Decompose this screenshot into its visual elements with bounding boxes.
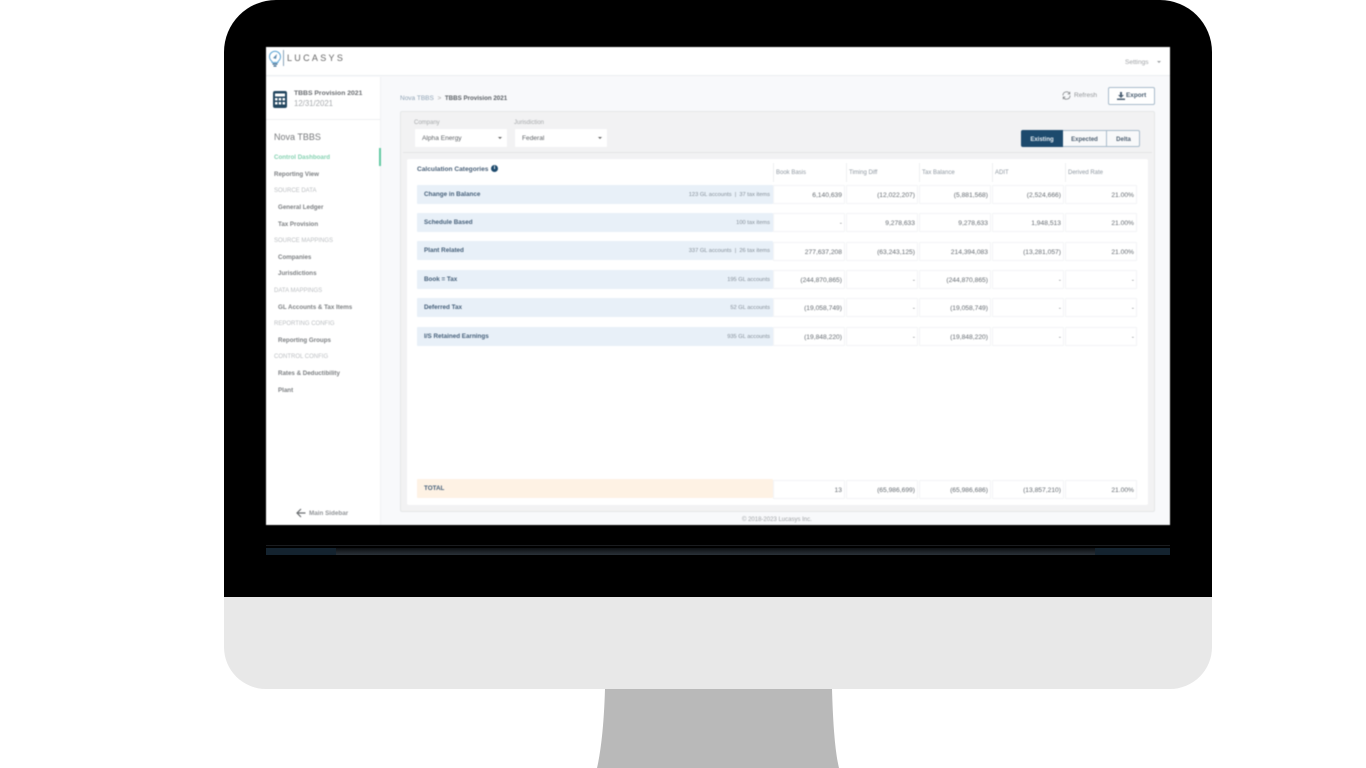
export label: Export xyxy=(1126,92,1146,99)
filter divider xyxy=(403,152,1152,153)
row label: change in balance xyxy=(417,185,773,204)
row label: book = tax: 195 GL accounts xyxy=(727,277,770,283)
logo wordmark: LUCASYS xyxy=(287,53,345,63)
row label: i/s retained earnings: I/S Retained Earnings xyxy=(424,333,489,340)
jurisdiction value: Federal xyxy=(522,135,544,142)
nav: jurisdictions: Jurisdictions xyxy=(278,270,317,277)
row values: book = tax: - xyxy=(913,277,915,284)
icon: refresh xyxy=(1062,90,1071,100)
jurisdiction dropdown xyxy=(515,129,607,147)
company value: Alpha Energy xyxy=(422,135,462,142)
row label: change in balance: Change in Balance xyxy=(424,191,480,198)
provision date: 12/31/2021 xyxy=(294,99,333,108)
row values: i/s retained earnings: - xyxy=(1132,334,1134,341)
row values: change in balance: (12,022,207) xyxy=(877,192,915,199)
row values: plant related xyxy=(774,242,1136,260)
row values: i/s retained earnings: - xyxy=(1059,334,1061,341)
nav: gl accounts and tax items: GL Accounts & Tax Items xyxy=(278,304,352,311)
company label: Company xyxy=(414,120,440,126)
calculation table card xyxy=(407,159,1148,505)
toggle: expected xyxy=(1063,130,1107,147)
row values: i/s retained earnings: (19,848,220) xyxy=(804,334,842,341)
section: source data: SOURCE DATA xyxy=(274,188,316,194)
row values: change in balance xyxy=(774,186,1136,204)
total values: 13 xyxy=(835,487,842,494)
toggle: existing: Existing xyxy=(1030,137,1054,143)
nav: plant: Plant xyxy=(278,387,293,394)
row values: plant related: (63,243,125) xyxy=(877,249,915,256)
sidebar header divider xyxy=(266,119,380,120)
top bar xyxy=(266,47,1170,76)
row values: plant related: 277,637,208 xyxy=(805,249,842,256)
nav: reporting groups: Reporting Groups xyxy=(278,337,331,344)
toggle: delta: Delta xyxy=(1116,137,1131,143)
icon: calculator xyxy=(272,90,288,109)
nav: reporting view: Reporting View xyxy=(274,171,319,178)
row values: plant related: (13,281,057) xyxy=(1023,249,1061,256)
company dropdown xyxy=(415,129,507,147)
jurisdiction label: Jurisdiction xyxy=(514,120,544,126)
row values: book = tax: - xyxy=(1132,277,1134,284)
row values: plant related: 21.00% xyxy=(1111,249,1134,256)
row label: plant related: Plant Related xyxy=(424,247,464,254)
row label: i/s retained earnings: 935 GL accounts xyxy=(727,334,770,340)
nav: control dashboard: Control Dashboard xyxy=(274,154,330,161)
row values: deferred tax: - xyxy=(1132,305,1134,312)
total label xyxy=(417,479,773,498)
row values: deferred tax: (19,058,749) xyxy=(804,305,842,312)
export button xyxy=(1108,87,1155,105)
row values: change in balance: 21.00% xyxy=(1111,192,1134,199)
settings caret xyxy=(1157,61,1161,65)
icon: info: i xyxy=(494,165,495,171)
column header: timing diff: Timing Diff xyxy=(849,170,877,176)
view toggle xyxy=(1021,130,1140,147)
row values: change in balance: 6,140,639 xyxy=(812,192,842,199)
total values: 21.00% xyxy=(1111,487,1134,494)
application screen xyxy=(266,47,1170,525)
row label: book = tax: Book = Tax xyxy=(424,276,457,283)
nav: tax provision: Tax Provision xyxy=(278,221,318,228)
row values: deferred tax xyxy=(774,298,1136,316)
icon: download xyxy=(1116,91,1126,101)
table heading: Calculation Categories xyxy=(417,166,488,173)
column header: adit: ADIT xyxy=(995,170,1009,176)
row values: schedule based: 9,278,633 xyxy=(885,220,915,227)
row values: deferred tax: - xyxy=(1059,305,1061,312)
row label: change in balance: 123 GL accounts | 37 tax items xyxy=(689,192,770,198)
row values: change in balance: (2,524,666) xyxy=(1027,192,1061,199)
total values: (13,857,210) xyxy=(1023,487,1061,494)
total values: (65,986,686) xyxy=(950,487,988,494)
row values: i/s retained earnings xyxy=(774,328,1136,346)
active nav marker xyxy=(379,148,381,166)
sidebar heading: Nova TBBS xyxy=(274,132,321,142)
row values: schedule based: 9,278,633 xyxy=(958,220,988,227)
row values: deferred tax: - xyxy=(913,305,915,312)
column header: tax balance: Tax Balance xyxy=(922,170,955,176)
column header: derived rate: Derived Rate xyxy=(1068,170,1103,176)
row values: i/s retained earnings: - xyxy=(913,334,915,341)
monitor bezel xyxy=(224,0,1212,597)
screen taskbar strip xyxy=(266,525,1170,555)
row values: deferred tax: (19,058,749) xyxy=(950,305,988,312)
row label: i/s retained earnings xyxy=(417,327,773,346)
icon: info xyxy=(491,165,498,172)
sidebar xyxy=(266,77,381,525)
column header: book basis: Book Basis xyxy=(776,170,806,176)
breadcrumb: Nova TBBS > TBBS Provision 2021 xyxy=(400,95,507,102)
row values: schedule based xyxy=(774,214,1136,232)
section: data mappings: DATA MAPPINGS xyxy=(274,288,322,294)
monitor chin xyxy=(224,560,1212,689)
row label: schedule based: Schedule Based xyxy=(424,219,473,226)
settings menu: Settings xyxy=(1125,59,1148,66)
row values: book = tax: - xyxy=(1059,277,1061,284)
row values: schedule based: 21.00% xyxy=(1111,220,1134,227)
section: control config: CONTROL CONFIG xyxy=(274,354,328,360)
row label: plant related xyxy=(417,241,773,260)
row values: book = tax: (244,870,865) xyxy=(800,277,842,284)
row values: schedule based: - xyxy=(840,220,842,227)
row label: deferred tax: 52 GL accounts xyxy=(730,305,770,311)
main sidebar link: Main Sidebar xyxy=(309,510,348,517)
row values: i/s retained earnings: (19,848,220) xyxy=(950,334,988,341)
total values: (65,986,699) xyxy=(877,487,915,494)
total label: TOTAL xyxy=(424,485,444,492)
monitor stand xyxy=(597,689,839,768)
row label: plant related: 337 GL accounts | 26 tax items xyxy=(689,248,770,254)
row label: book = tax xyxy=(417,270,773,289)
icon: back arrow xyxy=(296,508,306,518)
row values: book = tax xyxy=(774,270,1136,288)
row values: plant related: 214,394,083 xyxy=(951,249,988,256)
jurisdiction caret xyxy=(598,137,602,141)
logo wordmark xyxy=(283,50,345,66)
refresh label: Refresh xyxy=(1074,92,1097,99)
nav: general ledger: General Ledger xyxy=(278,204,323,211)
row label: deferred tax: Deferred Tax xyxy=(424,304,462,311)
nav: companies: Companies xyxy=(278,254,311,261)
section: source mappings: SOURCE MAPPINGS xyxy=(274,238,333,244)
toggle: expected: Expected xyxy=(1071,137,1098,143)
main gray panel xyxy=(400,111,1155,512)
row label: schedule based: 100 tax items xyxy=(736,220,770,226)
provision title: TBBS Provision 2021 xyxy=(294,90,362,97)
row values: schedule based: 1,948,513 xyxy=(1031,220,1061,227)
row label: deferred tax xyxy=(417,298,773,317)
section: reporting config: REPORTING CONFIG xyxy=(274,321,335,327)
company caret xyxy=(498,137,502,141)
toggle: existing xyxy=(1021,130,1063,147)
row values: change in balance: (5,881,568) xyxy=(954,192,988,199)
footer copyright: © 2018-2023 Lucasys Inc. xyxy=(742,517,812,523)
icon: lightbulb logo xyxy=(268,50,282,68)
row label: schedule based xyxy=(417,213,773,232)
total values xyxy=(774,480,1136,498)
nav: rates and deductibility: Rates & Deductibility xyxy=(278,370,340,377)
row values: book = tax: (244,870,865) xyxy=(946,277,988,284)
